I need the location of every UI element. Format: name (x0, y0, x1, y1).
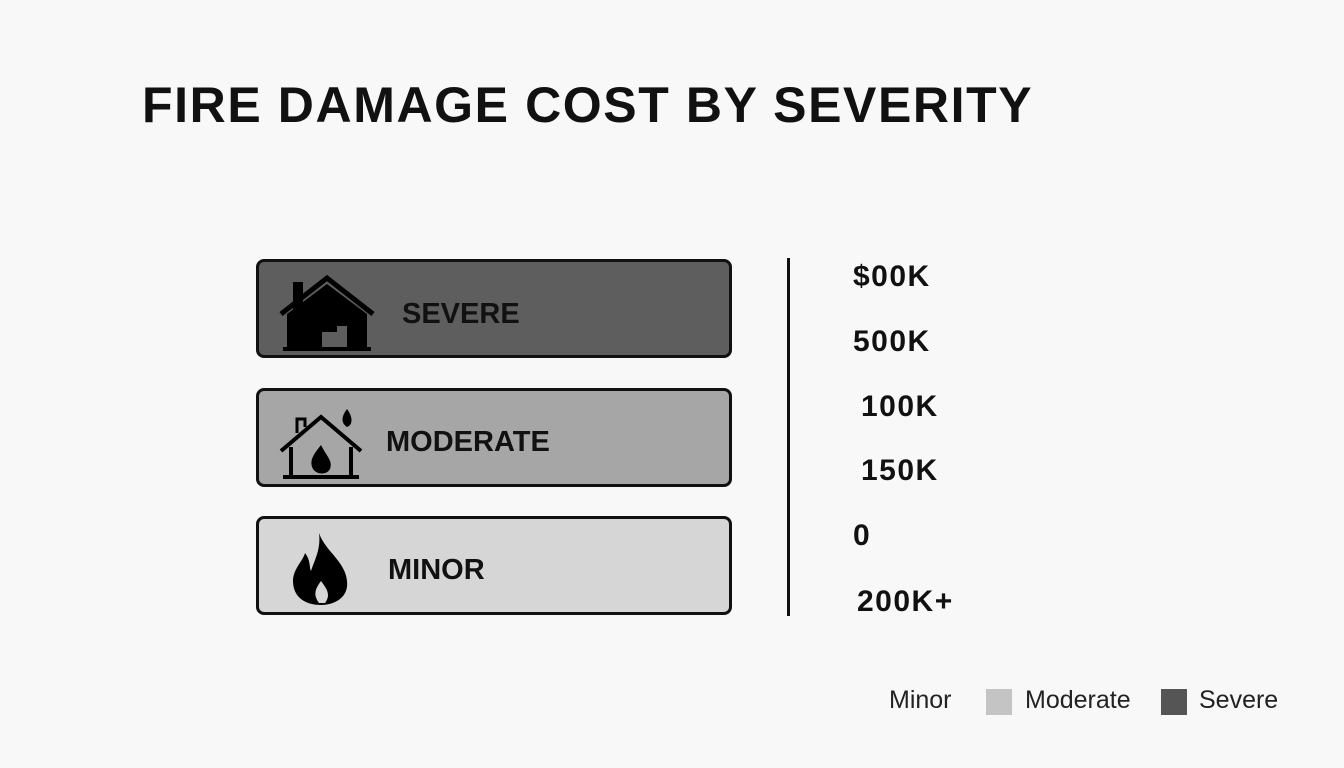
legend: Moderate (1025, 686, 1131, 714)
legend (889, 686, 1278, 715)
axis values: 0 (853, 519, 871, 552)
label: moderate: MODERATE (386, 426, 550, 458)
icon: flame (293, 533, 348, 605)
label: severe: SEVERE (402, 298, 520, 330)
title: FIRE DAMAGE COST BY SEVERITY (142, 77, 1033, 133)
axis values: $00K (853, 260, 931, 293)
icon: damaged house (280, 275, 374, 351)
legend swatch: severe (1161, 689, 1187, 715)
legend: Minor (889, 686, 952, 714)
icon: house with fire (280, 409, 362, 479)
axis values: 100K (861, 390, 939, 423)
axis values: 500K (853, 325, 931, 358)
axis values: 150K (861, 454, 939, 487)
panel: moderate bar (256, 388, 732, 487)
axis values: 200K+ (857, 585, 954, 618)
legend swatch: moderate (986, 689, 1012, 715)
panel: severe bar (256, 259, 732, 358)
legend: Severe (1199, 686, 1278, 714)
label: minor: MINOR (388, 554, 485, 586)
axis line (787, 258, 790, 616)
panel: minor bar (256, 516, 732, 615)
